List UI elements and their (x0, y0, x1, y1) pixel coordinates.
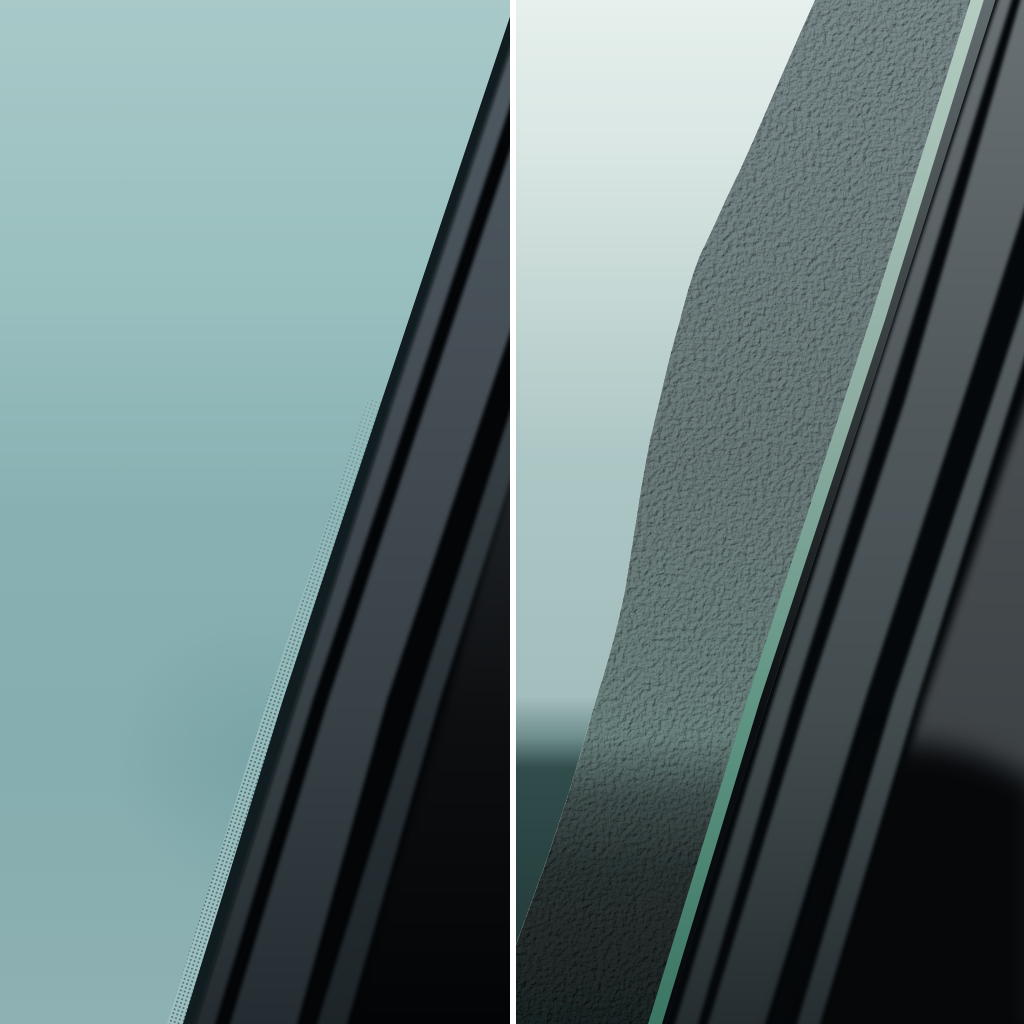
textured frit band (516, 0, 980, 1024)
light edge stripe (637, 0, 993, 1024)
panel divider (510, 0, 516, 1024)
left glass dotted edge (167, 400, 382, 1024)
left glass pane (0, 0, 510, 1024)
panel: right window, treated glass (516, 0, 1024, 1024)
right window frame (651, 0, 1024, 1024)
left window frame (183, 17, 510, 1024)
right glass pane (516, 0, 963, 1024)
panel: left window, untreated glass (0, 0, 560, 1024)
